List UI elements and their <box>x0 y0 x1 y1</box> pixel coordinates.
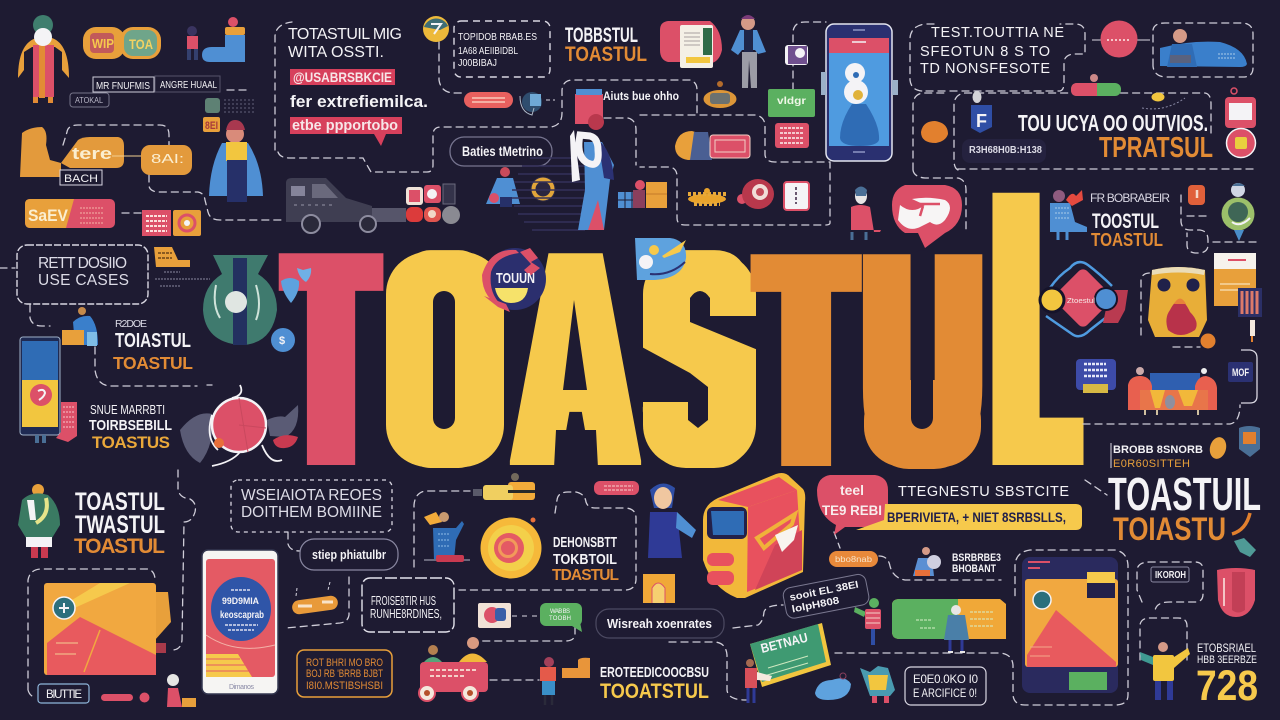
text: heading with yellow bar: BPERIVIETA, + NIET 8SRBSLLS, <box>887 509 1066 525</box>
text: right lower caption: E0R60SITTEH <box>1113 458 1190 470</box>
text panel: rounded outline <box>905 667 986 705</box>
label boxes: ATOKAL <box>75 96 104 105</box>
text panel: rounded outline: E ARCIFICE 0! <box>913 688 977 700</box>
figure: round green character <box>1222 183 1254 241</box>
icon: orange mitten and callouts: tere <box>72 144 112 163</box>
figure: person in blue cape <box>209 120 263 202</box>
icon: green vase <box>203 255 277 345</box>
icon: green tile with dot grid <box>205 98 255 113</box>
text panel: orange outline: BOJ RB 'BRRB BJBT <box>306 668 383 680</box>
figure: person with globe <box>913 547 941 576</box>
donut with spiral <box>480 518 542 578</box>
text block with highlights: WITA OSSTI. <box>288 44 384 61</box>
pill: red small <box>594 481 639 495</box>
figure: green person <box>18 484 60 558</box>
text: caption two lines: BSRBRBE3 <box>952 552 1001 564</box>
heading: toostul right: TOOSTUL <box>1092 210 1159 233</box>
tile: picture and green bubble: WAB BS <box>550 609 570 615</box>
stat: 728: HBB 3EERBZE <box>1197 654 1257 666</box>
text: right lower caption: BROBB 8SNORB <box>1113 444 1203 456</box>
tile grid <box>406 184 460 224</box>
text: right lower caption <box>1111 443 1203 470</box>
tiles: pink and orange <box>142 210 201 236</box>
figure: central person in white and blue <box>570 89 614 230</box>
text panel: wseiaiota <box>231 480 392 532</box>
text panel: use cases: USE CASES <box>38 272 129 289</box>
icon: gold ornament <box>1142 92 1185 109</box>
text block with highlights: TOTASTUIL MIG <box>288 26 402 43</box>
card: green orange <box>892 599 1006 639</box>
pill: stiep: stiep phiatulbr <box>312 547 386 562</box>
speech bubble <box>892 185 962 248</box>
heading: toastul lower left: TOASTUL <box>75 488 165 516</box>
speech bubble: test: teel <box>840 482 864 498</box>
heading: toastul lower left: TOASTUL <box>74 535 165 558</box>
tile: red text <box>775 123 809 148</box>
figure: seated person in red <box>851 186 881 240</box>
text block with highlights: etbe ppportobo <box>292 117 398 134</box>
badge pair: WIP <box>92 36 114 51</box>
heading: top right <box>1018 110 1213 164</box>
text panel: three lines: TOPIDOB RBAB.ES <box>458 32 537 43</box>
heading: left middle <box>89 402 172 452</box>
heading: toastuil big <box>1108 468 1261 547</box>
heading: toastul lower left: TWASTUL <box>75 511 165 539</box>
truck <box>286 178 406 233</box>
title: U <box>866 192 979 529</box>
striped disc <box>512 158 585 230</box>
blob: orange <box>921 121 948 143</box>
figure: person with orange hat <box>424 512 470 562</box>
pill: orange tag: bbo8nab <box>835 555 873 564</box>
figure: person in blue parka <box>944 605 969 652</box>
icon: red globe with leaves <box>180 385 298 466</box>
title: T <box>292 190 370 528</box>
text panel: froise <box>362 578 454 632</box>
icon: orange mitten and callouts <box>20 127 192 185</box>
phone: left <box>20 337 60 443</box>
icon: pumpkin <box>704 81 736 108</box>
tag: mof: MOF <box>1232 367 1249 379</box>
heading: toostul right <box>1090 191 1170 250</box>
figure: person with F: F <box>976 111 987 131</box>
diamond node: Ztoestul <box>1067 298 1095 305</box>
label boxes: MR FNUFMIS <box>96 80 150 92</box>
text panel: rounded outline: E0E0.0KO I0 <box>913 674 978 686</box>
figure: person with green card <box>745 659 772 703</box>
pill: dark stat: R3H68H0B:H138 <box>969 144 1042 156</box>
heading: toiastul left <box>113 318 193 373</box>
text block: top right: TD NONSFESOTE <box>920 61 1050 77</box>
heading: left middle: TOIRBSEBILL <box>89 417 172 434</box>
heading: top right: TPRATSUL <box>1099 132 1213 164</box>
title: L <box>1000 111 1072 547</box>
icon: yellow frame tile <box>643 574 675 603</box>
figure: small red and yellow <box>167 674 196 707</box>
heading: toostul right: FR BOBRABEIR <box>1090 191 1170 205</box>
card: vertical <box>784 182 809 210</box>
badge pair <box>83 27 161 59</box>
tile: green <box>768 89 815 117</box>
text: caption two lines <box>952 552 1001 575</box>
icon: red cup <box>1217 568 1255 617</box>
heading: left middle: TOASTUS <box>92 433 170 452</box>
figure: man standing <box>731 15 766 88</box>
figure: person arms raised <box>1140 642 1190 700</box>
icon: dollar coin and hearts <box>271 268 311 352</box>
phone: main <box>821 24 898 161</box>
text: heading with yellow bar: TTEGNESTU SBSTCITE <box>898 484 1069 500</box>
tile: picture and green bubble: TOOBH <box>549 616 571 622</box>
pill: rotated dark note: sooit EL 38EI <box>789 579 860 604</box>
stat: 728 <box>1196 643 1258 710</box>
card: orange document <box>1214 253 1262 342</box>
heading: left middle: SNUE MARRBTI <box>90 402 165 417</box>
title: A <box>520 190 631 527</box>
icon: blue yellow coin <box>423 16 449 42</box>
icon: face with pink card <box>675 131 750 160</box>
text panel: orange outline: ROT BHRI MO BRO <box>306 657 383 669</box>
speech bubble: test: TE9 REBI <box>822 502 882 518</box>
figure: person with coin <box>486 167 555 207</box>
figure: person with orange couch <box>540 657 590 705</box>
pill: red green <box>1071 74 1121 96</box>
icon: orange tile <box>1188 185 1205 205</box>
illustration: couch <box>1128 367 1217 415</box>
icon: orange crate with scribbles <box>154 247 210 286</box>
card: green rotated: BETNAU <box>759 630 809 656</box>
figure: green head person stripes <box>854 598 881 645</box>
heading: toastuil big: TOIASTU <box>1113 511 1226 547</box>
title: T <box>764 190 848 528</box>
heading: donut right: TDASTUL <box>552 567 619 584</box>
heading: toastul top: TOASTUL <box>565 43 647 66</box>
phone: red screen <box>202 550 278 694</box>
text panel: froise: FROISE8TIR HUS <box>371 594 436 608</box>
text panel: orange outline: I8I0.MSTIBSHSBI <box>306 680 383 692</box>
icon: chart and orange crate <box>618 180 667 208</box>
heading: toiastul left: TOASTUL <box>113 353 193 373</box>
text block: top right <box>920 25 1064 77</box>
text panel: use cases: RETT DOSIIO <box>38 255 127 272</box>
text: heading with yellow bar <box>856 484 1082 530</box>
note: pink <box>56 402 77 442</box>
pill: rotated dark note: lolpH808 <box>791 595 841 615</box>
icon: dollar coin and hearts: $ <box>279 335 285 347</box>
text block with highlights: fer extrefiemilca. <box>290 92 428 111</box>
text panel: wseiaiota: DOITHEM BOMIINE <box>241 504 382 521</box>
diamond node <box>1038 262 1128 336</box>
heading: toostul right: TOASTUL <box>1091 230 1163 250</box>
pill: rotated dark note <box>782 573 870 620</box>
figure: navy person <box>648 483 696 558</box>
button: biuttie <box>38 684 89 703</box>
text block: top right: TEST.TOUTTIA NE <box>931 25 1064 41</box>
icon: orange mitten and callouts: BACH <box>64 173 98 185</box>
tag: orange <box>203 117 220 132</box>
icon: blue tile with bird <box>635 238 686 280</box>
pill: wisreah <box>596 609 724 638</box>
pill: orange capsule <box>291 582 339 615</box>
heading: toiastul left: TOIASTUL <box>115 330 191 352</box>
icons: leaf and small tile <box>1207 426 1260 461</box>
tile: green: vldgr <box>777 96 806 107</box>
tile: picture and green bubble <box>478 603 582 632</box>
phone: red screen: 99D9MIA <box>222 596 259 606</box>
text block with highlights: @USABRSBKCIE <box>293 69 392 85</box>
figure: blue bust card <box>1160 29 1247 67</box>
character: yellow face <box>1148 267 1216 348</box>
title: S <box>653 190 747 528</box>
tag: saev <box>25 199 115 228</box>
pill: metrics: Baties tMetrino <box>462 144 543 159</box>
tile: blue info <box>1076 359 1116 393</box>
text: caption: Aiuts bue ohho <box>603 89 679 103</box>
badge: touun <box>482 248 546 312</box>
title <box>292 111 1072 547</box>
heading: donut right: TOKBTOIL <box>553 551 617 568</box>
label boxes <box>70 76 220 107</box>
heading: toastul lower left <box>74 488 165 558</box>
pill: wisreah: Wisreah xoenrates <box>607 617 712 631</box>
button: biuttie: BIUTTIE <box>46 689 82 701</box>
tag: orange: 8EI <box>205 120 218 132</box>
heading: bottom center: TOOATSTUL <box>600 680 709 703</box>
icons: blue blob and creature <box>815 666 895 703</box>
speech bubble: test <box>817 475 888 535</box>
text panel: three lines: J00BIBAJ <box>458 58 497 69</box>
title: O <box>395 191 495 528</box>
badge: touun: TOUUN <box>496 270 535 287</box>
figure: small person and boot <box>187 17 245 62</box>
text panel: wseiaiota: WSEIAIOTA REOES <box>241 487 382 504</box>
illustration: mailbox machine <box>703 473 805 598</box>
pill: dark stat <box>962 139 1046 163</box>
card: yellow landscape <box>44 583 171 675</box>
badge pair: TOA <box>129 36 153 52</box>
pill: stiep <box>300 539 398 570</box>
text panel: ikoroh <box>1151 567 1189 582</box>
icon: purple tile <box>785 45 808 65</box>
icon: red ring seal <box>737 179 774 209</box>
heading: toastul top: TOBBSTUL <box>565 24 638 47</box>
text: caption two lines: BHOBANT <box>952 563 996 575</box>
phone: red screen: Dimanos <box>229 684 254 691</box>
phone: dark with card <box>1022 557 1118 693</box>
stat: 728: 728 <box>1196 662 1258 710</box>
text panel: orange outline <box>297 650 392 697</box>
pill: metrics <box>450 137 552 166</box>
icon: orange swirl and teal note <box>1232 513 1256 557</box>
ornament row <box>688 188 726 204</box>
pill and head icon <box>464 92 555 115</box>
heading: bottom center: EROTEEDICOOCBSU <box>600 664 709 681</box>
text panel: froise: RUNHE8RDINES, <box>370 607 442 621</box>
figure: person at desk <box>62 307 98 346</box>
heading: bottom center <box>600 664 709 703</box>
text block: top right: SFEOTUN 8 S TO <box>920 44 1050 60</box>
heading: toiastul left: R2DOE <box>115 318 147 330</box>
text panel: three lines: 1A68 AEIIBIDBL <box>458 46 518 57</box>
illustration: bus with riders <box>419 637 488 701</box>
phone: red screen: keoscaprab <box>220 610 264 621</box>
pill: orange tag <box>829 551 878 567</box>
icon: orange mitten and callouts: 8AI: <box>151 151 184 166</box>
figure: person with F <box>971 91 992 133</box>
text panel: ikoroh: IKOROH <box>1155 570 1186 581</box>
icon: flashlight <box>473 473 535 500</box>
figure: robed man <box>18 15 69 103</box>
stat: 728: ETOBSRIAEL <box>1197 643 1256 655</box>
label boxes: ANGRE HUAAL <box>160 80 217 91</box>
tag: saev: SaEV <box>28 206 69 225</box>
heading: donut right <box>552 534 619 584</box>
text panel: three lines <box>454 21 550 77</box>
text block with highlights <box>288 26 428 146</box>
icon: red frame and round badge <box>1225 88 1256 158</box>
pill and dot <box>101 692 150 702</box>
tag: mof <box>1228 350 1257 403</box>
red circle node <box>1092 20 1150 58</box>
heading: toastul top <box>565 24 647 66</box>
text panel: use cases <box>17 245 148 304</box>
card: green rotated <box>750 623 831 687</box>
heading: donut right: DEHONSBTT <box>553 534 617 551</box>
figure: blue person with red bird <box>1050 190 1087 240</box>
card: document <box>660 21 722 68</box>
